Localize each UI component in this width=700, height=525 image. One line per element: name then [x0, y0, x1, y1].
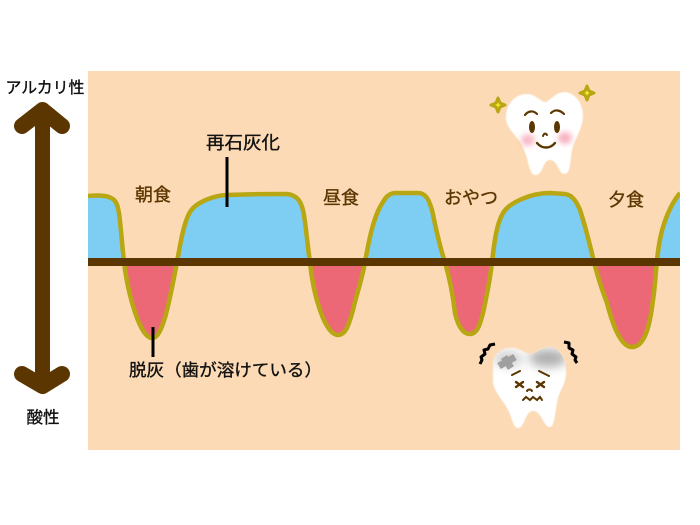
icon: shake marks left — [480, 344, 495, 364]
icon: happy tooth — [506, 92, 583, 175]
icon: sparkle right — [580, 86, 594, 100]
pointer: demineralization — [152, 327, 154, 357]
icon: sparkle left — [491, 98, 505, 112]
label: demineralization: 脱灰（歯が溶けている） — [129, 361, 322, 380]
label: lunch: 昼食 — [323, 188, 359, 208]
label: snack: おやつ — [444, 188, 498, 208]
decay shading — [493, 349, 567, 367]
face — [525, 110, 564, 148]
curve outline — [88, 193, 680, 347]
label: alkaline: アルカリ性 — [6, 79, 84, 97]
icon: decayed tooth — [493, 347, 567, 428]
cheek right — [558, 132, 572, 144]
chart: pH curve — [88, 193, 680, 347]
pointer: remineralization — [226, 157, 228, 207]
baseline — [88, 258, 680, 266]
arrow: alkaline to acid axis — [22, 110, 62, 386]
label: acidic: 酸性 — [26, 408, 60, 427]
face — [512, 371, 549, 400]
label: breakfast: 朝食 — [135, 185, 171, 205]
area: remineralization (blue) — [88, 195, 680, 258]
label: dinner: 夕食 — [608, 190, 644, 210]
cheek left — [521, 134, 535, 146]
tooth body — [506, 92, 583, 175]
panel: background — [88, 71, 680, 450]
label: remineralization: 再石灰化 — [206, 133, 280, 153]
tooth body — [493, 347, 566, 428]
bandage — [499, 357, 515, 368]
area: demineralization (red) — [126, 266, 654, 345]
diagram: acid-alkaline balance through the day — [7, 71, 680, 450]
icon: shake marks right — [564, 342, 577, 363]
